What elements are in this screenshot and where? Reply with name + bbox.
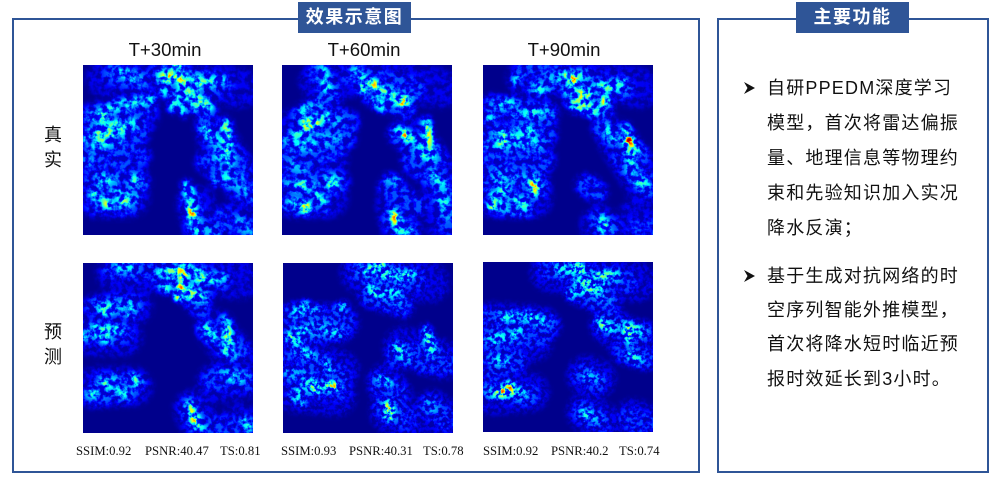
- column title: T+90min: T+90min: [528, 39, 600, 60]
- bullet text 1: 束和先验知识加入实况: [767, 183, 959, 203]
- bullet text 1: 自研PPEDM深度学习: [767, 78, 952, 98]
- metrics: column 1: TS:0.81: [220, 444, 261, 458]
- heading: main functions: 主要功能: [814, 7, 892, 27]
- metrics: column 1: SSIM:0.92: [76, 444, 131, 458]
- heading: effect demonstration: 效果示意图: [306, 7, 403, 27]
- radar map: prediction T+60: [283, 263, 453, 433]
- metrics: column 3: [483, 444, 660, 458]
- radar map: prediction T+30: [83, 263, 253, 433]
- radar map: truth T+90: [483, 65, 653, 235]
- bullet text 1: 模型，首次将雷达偏振: [767, 113, 959, 133]
- radar map: prediction T+90: [483, 262, 653, 432]
- panel: main functions: [717, 18, 989, 473]
- metrics: column 1: [76, 444, 261, 458]
- radar map: truth T+60: [282, 65, 452, 235]
- metrics: column 2: SSIM:0.93: [281, 444, 336, 458]
- metrics: column 2: PSNR:40.31: [349, 444, 413, 458]
- panel: effect demonstration: [12, 18, 700, 473]
- metrics: column 2: TS:0.78: [423, 444, 464, 458]
- icon: bullet arrow 1: [744, 82, 755, 94]
- bullet text 2: 基于生成对抗网络的时: [767, 266, 959, 286]
- bullet text 1: [767, 78, 959, 238]
- radar map: truth T+30: [83, 65, 253, 235]
- column title: T+60min: T+60min: [328, 39, 400, 60]
- row label: ground truth: 实: [44, 150, 62, 170]
- row label: ground truth: 真: [44, 125, 62, 145]
- bullet text 1: 降水反演；: [767, 218, 863, 238]
- bullet text 1: 量、地理信息等物理约: [767, 148, 959, 168]
- heading: main functions: [796, 2, 909, 33]
- bullet text 2: [767, 266, 959, 389]
- bullet text 2: 空序列智能外推模型，: [767, 300, 959, 320]
- metrics: column 3: SSIM:0.92: [483, 444, 538, 458]
- row label: prediction: 测: [44, 347, 62, 367]
- row label: prediction: 预: [44, 322, 62, 342]
- metrics: column 3: PSNR:40.2: [551, 444, 608, 458]
- metrics: column 3: TS:0.74: [619, 444, 660, 458]
- row label: prediction: [44, 322, 62, 367]
- column title: T+30min: T+30min: [129, 39, 201, 60]
- icon: bullet arrow 2: [744, 270, 755, 282]
- bullet text 2: 报时效延长到3小时。: [767, 369, 951, 389]
- metrics: column 1: PSNR:40.47: [145, 444, 209, 458]
- heading: effect demonstration: [298, 2, 411, 33]
- bullet text 2: 首次将降水短时临近预: [767, 334, 959, 354]
- metrics: column 2: [281, 444, 464, 458]
- row label: ground truth: [44, 125, 62, 170]
